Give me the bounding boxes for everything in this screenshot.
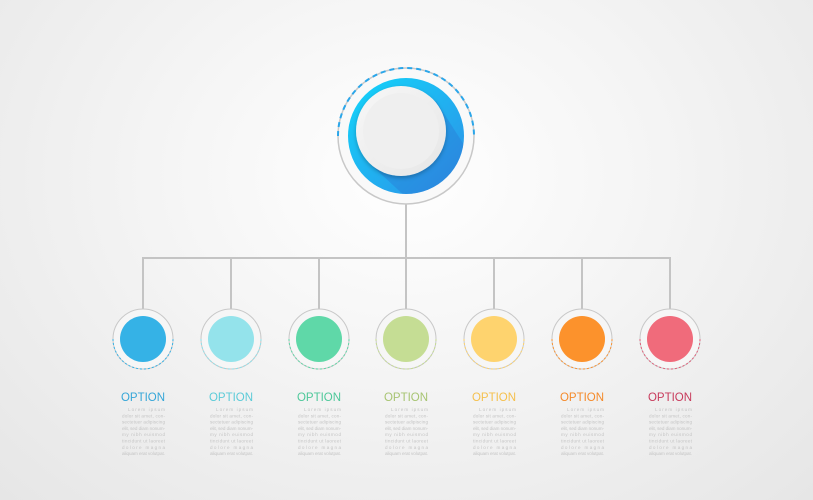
body text blocks: aliquam erat volutpat.	[122, 451, 165, 456]
body text blocks: tincidunt ut laoreet	[122, 438, 166, 444]
option 5	[464, 309, 524, 404]
option 4	[376, 309, 436, 404]
body text blocks: my nibh euismod	[122, 432, 165, 437]
option 2	[201, 309, 261, 404]
body text blocks: elit, sed diam nonum-	[122, 426, 165, 431]
main hub circle	[338, 68, 480, 210]
connector lines	[143, 202, 671, 309]
option 2: OPTION	[209, 392, 253, 404]
option 7: OPTION	[648, 392, 692, 404]
option 7	[640, 309, 700, 404]
option 6: OPTION	[560, 392, 604, 404]
option items	[113, 309, 700, 404]
option 1	[113, 309, 173, 404]
option 6	[552, 309, 612, 404]
body text blocks: Lorem ipsum	[128, 407, 165, 412]
body text blocks	[122, 407, 693, 456]
option 1: OPTION	[121, 392, 165, 404]
option 3	[289, 309, 349, 404]
body text blocks: dolor sit amet, con-	[122, 413, 165, 418]
option 5: OPTION	[472, 392, 516, 404]
option 3: OPTION	[297, 392, 341, 404]
option 4: OPTION	[384, 392, 428, 404]
body text blocks: dolore magna	[122, 445, 165, 450]
body text blocks: sectetuer adipiscing	[122, 420, 165, 425]
